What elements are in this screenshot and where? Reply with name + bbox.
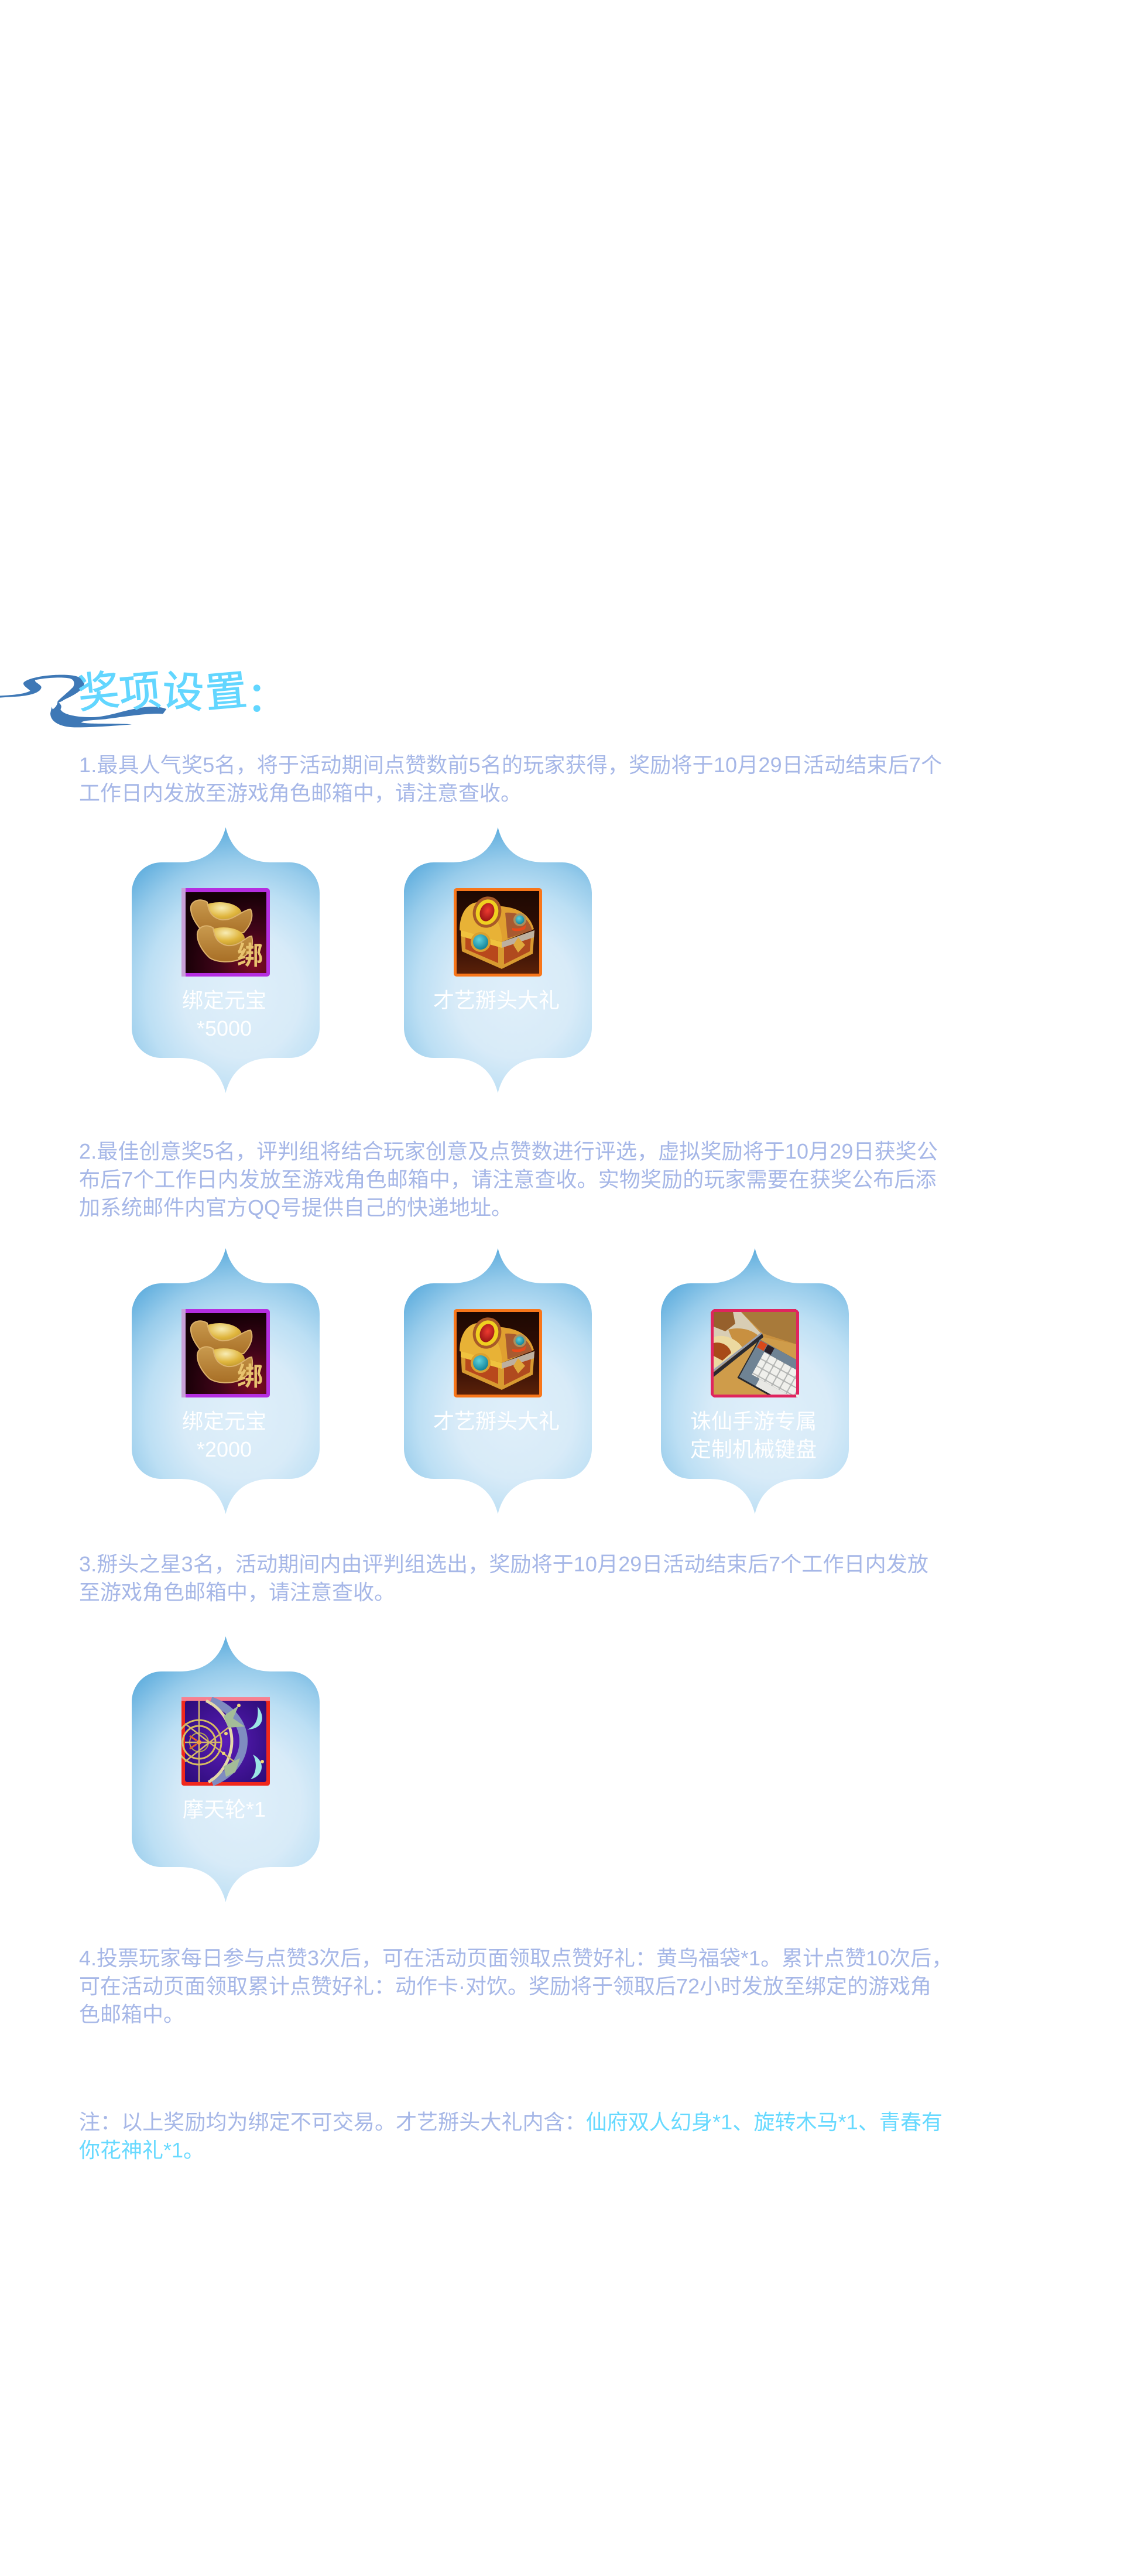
text block: rule 2: 布后7个工作日内发放至游戏角色邮箱中，请注意查收。实物奖励的玩家需要在获奖公布后添 — [79, 1167, 937, 1191]
text block: rule 2: 2.最佳创意奖5名，评判组将结合玩家创意及点赞数进行评选，虚拟奖励将于10月29日获奖公 — [79, 1139, 938, 1163]
heading: 奖项设置: 置 — [204, 667, 249, 717]
icon: ferris wheel — [181, 1697, 270, 1786]
text block: rule 4: 可在活动页面领取累计点赞好礼：动作卡·对饮。奖励将于领取后72小时发放至绑定的游戏角 — [79, 1974, 931, 1998]
text block: rule 1: 1.最具人气奖5名，将于活动期间点赞数前5名的玩家获得，奖励将于10月29日活动结束后7个 — [79, 753, 942, 777]
icon: treasure chest — [454, 1309, 542, 1397]
label — [182, 988, 266, 1040]
label: 才艺掰头大礼 — [433, 1409, 560, 1433]
panel: reward 绑定元宝*5000 — [132, 827, 320, 1093]
icon: gold ingots: 绑 — [237, 1355, 263, 1393]
icon: gold ingots — [181, 1309, 270, 1397]
heading: 奖项设置 — [76, 667, 262, 719]
text block: rule 3: 3.掰头之星3名，活动期间内由评判组选出，奖励将于10月29日活动结束后7个工作日内发放 — [79, 1552, 928, 1576]
text block: rule 2 — [79, 1139, 938, 1220]
icon: gold ingots: 绑 — [237, 934, 263, 972]
label: 摩天轮*1 — [183, 1797, 266, 1821]
text block: note — [79, 2110, 943, 2162]
heading: 奖项设置: 奖 — [76, 667, 122, 717]
text block: rule 4: 色邮箱中。 — [79, 2002, 184, 2026]
text block: rule 4: 4.投票玩家每日参与点赞3次后，可在活动页面领取点赞好礼：黄鸟福袋*1。累计点赞10次后， — [79, 1946, 952, 1970]
label: 绑定元宝 — [182, 988, 266, 1012]
text block: rule 2: 加系统邮件内官方QQ号提供自己的快递地址。 — [79, 1195, 512, 1220]
panel: reward 才艺掰头大礼 (rule 2) — [404, 1248, 592, 1514]
text block: rule 4 — [79, 1946, 952, 2026]
label — [690, 1409, 817, 1461]
icon: treasure chest — [454, 888, 542, 977]
icon: blue ink swoosh — [0, 674, 166, 727]
label: 才艺掰头大礼 — [433, 988, 560, 1012]
heading: 奖项设置: 项 — [118, 667, 163, 717]
heading: 奖项设置: 设 — [160, 668, 205, 717]
text block: note: 你花神礼*1。 — [79, 2138, 204, 2162]
icon: mechanical keyboard photo — [711, 1309, 799, 1397]
label: 定制机械键盘 — [690, 1437, 817, 1461]
text block: rule 1: 工作日内发放至游戏角色邮箱中，请注意查收。 — [79, 781, 522, 805]
text block: rule 1 — [79, 753, 942, 805]
label: 诛仙手游专属 — [690, 1409, 817, 1433]
text block: note: 注：以上奖励均为绑定不可交易。才艺掰头大礼内含：仙府双人幻身*1、旋转木马*1、青春有 — [79, 2110, 943, 2134]
panel: reward 摩天轮*1 — [132, 1636, 320, 1902]
panel: reward 绑定元宝*2000 — [132, 1248, 320, 1514]
label: 绑定元宝 — [182, 1409, 266, 1433]
label: *5000 — [197, 1016, 252, 1040]
text block: rule 3 — [79, 1552, 928, 1604]
label: *2000 — [197, 1437, 252, 1461]
icon: gold ingots — [181, 888, 270, 977]
label — [182, 1409, 266, 1461]
panel: reward 定制机械键盘 — [661, 1248, 849, 1514]
text block: rule 3: 至游戏角色邮箱中，请注意查收。 — [79, 1580, 395, 1604]
panel: reward 才艺掰头大礼 — [404, 827, 592, 1093]
